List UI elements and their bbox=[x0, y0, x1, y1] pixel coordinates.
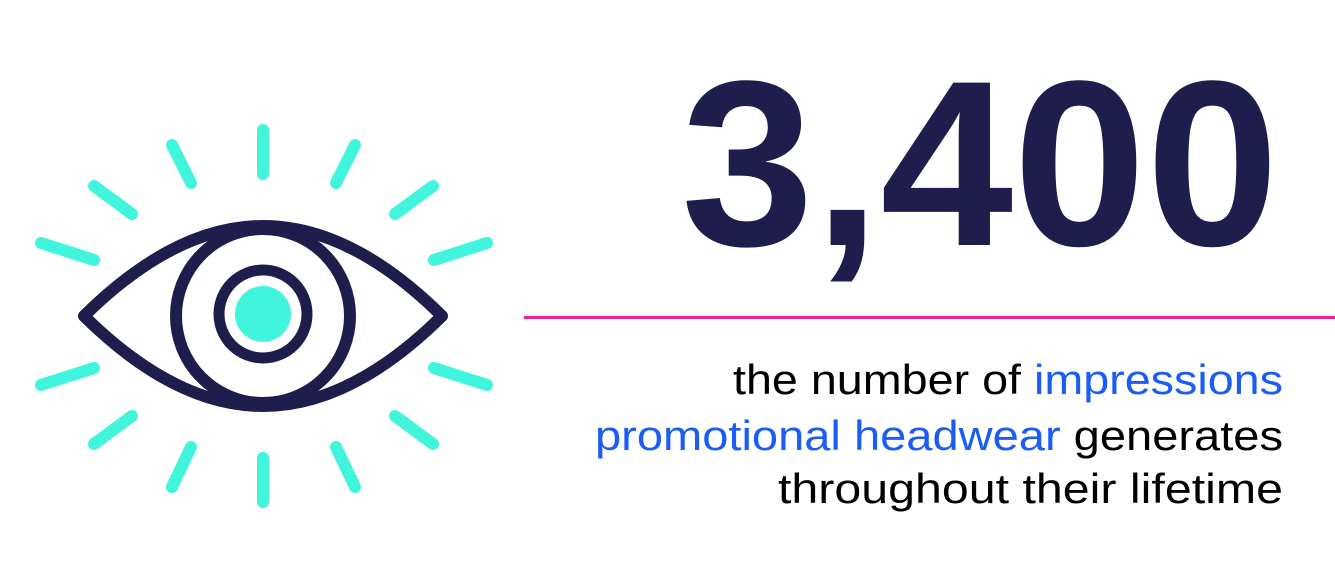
caption text: the number of impressions bbox=[733, 356, 1283, 403]
pupil bbox=[235, 286, 291, 342]
caption text bbox=[595, 356, 1283, 512]
caption text: throughout their lifetime bbox=[778, 465, 1283, 512]
caption text: promotional headwear generates bbox=[595, 412, 1283, 459]
big number: 3,400 bbox=[681, 32, 1279, 296]
rays bbox=[41, 130, 487, 502]
inner ring bbox=[219, 270, 307, 358]
divider line bbox=[524, 316, 1335, 319]
iris bbox=[176, 229, 350, 403]
eye outline bbox=[84, 226, 442, 406]
icon: eye with rays bbox=[41, 130, 487, 502]
